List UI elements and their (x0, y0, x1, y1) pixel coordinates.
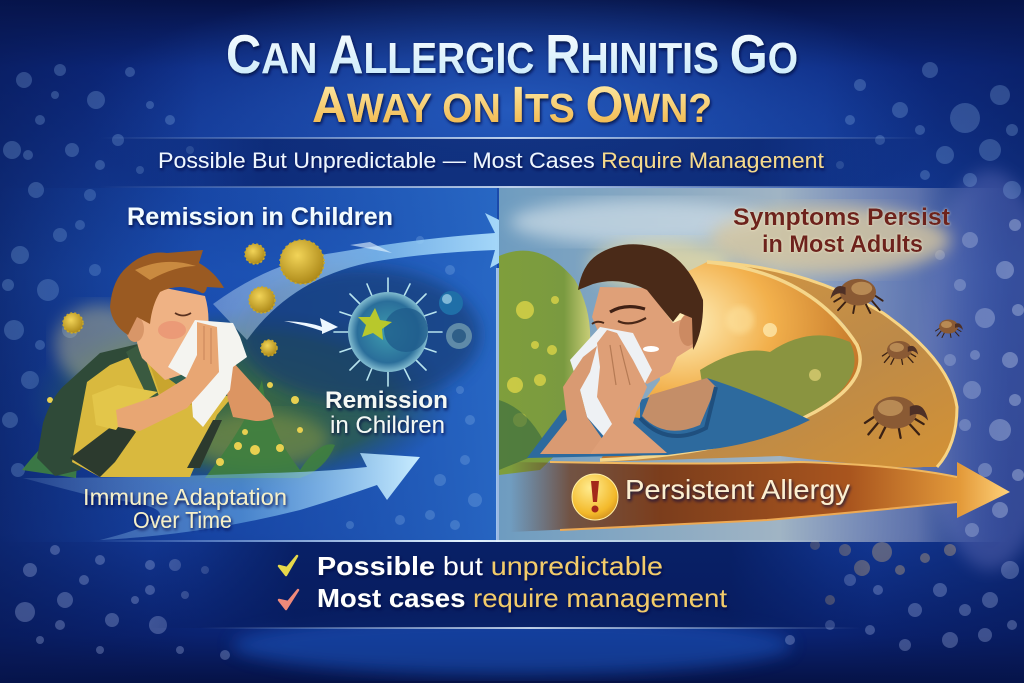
curved arrow: time to remission (213, 213, 540, 340)
straps (70, 420, 136, 477)
title (226, 23, 798, 133)
hair (578, 244, 703, 350)
child sneezing (37, 250, 274, 477)
subtitle (100, 137, 924, 188)
sky and trees (499, 188, 1009, 542)
title: CAN ALLERGIC RHINITIS GO (226, 23, 798, 85)
panel: symptoms persist (499, 188, 1010, 542)
adult sneezing (527, 244, 810, 458)
sleeve (92, 385, 158, 430)
small arrow to cell (284, 318, 338, 334)
pollen grains (63, 240, 324, 356)
heading: symptoms persist: in Most Adults (762, 231, 923, 258)
tissue (168, 320, 247, 427)
backpack (37, 343, 157, 476)
panel: remission in children (0, 188, 540, 542)
orange crescent arrow (600, 262, 957, 468)
trees inside crescent (700, 335, 855, 448)
subtitle: Possible But Unpredictable — Most Cases Require Management (158, 148, 824, 173)
label: immune adaptation: Over Time (133, 507, 232, 533)
garden background (22, 267, 480, 492)
label: remission in children (325, 387, 448, 439)
bottom arrow: immune adaptation (23, 453, 420, 540)
heading: symptoms persist: Symptoms Persist (733, 204, 950, 231)
label: persistent allergy: Persistent Allergy (625, 474, 850, 505)
title: AWAY ON ITS OWN? (312, 76, 712, 133)
heading: remission in children: Remission in Children (127, 203, 393, 231)
icon: warning (572, 474, 618, 520)
label: immune adaptation: Immune Adaptation (83, 484, 287, 510)
left hand (540, 346, 603, 454)
panel divider (496, 268, 499, 542)
hand and front arm (116, 322, 219, 431)
point: possible but unpredictable: Possible but unpredictable (317, 551, 663, 581)
icon: red check (279, 590, 298, 609)
point: most cases require management: Most cases require management (317, 583, 728, 613)
label: remission in children: Remission (325, 387, 448, 414)
right hand and forearm (590, 330, 667, 454)
rear arm (224, 362, 274, 421)
icon: immune cell (334, 278, 472, 386)
label: immune adaptation (83, 484, 287, 533)
label: remission in children: in Children (330, 412, 445, 439)
face (592, 287, 697, 384)
t-shirt (527, 378, 810, 458)
arrow: persistent allergy (510, 462, 1010, 532)
summary (90, 540, 874, 629)
face and neck (135, 288, 208, 380)
shirt (72, 353, 232, 477)
hair (110, 250, 224, 335)
icon: yellow check (279, 556, 297, 575)
tissue (570, 327, 652, 440)
dust mites (830, 279, 963, 438)
heading: symptoms persist (733, 204, 950, 258)
